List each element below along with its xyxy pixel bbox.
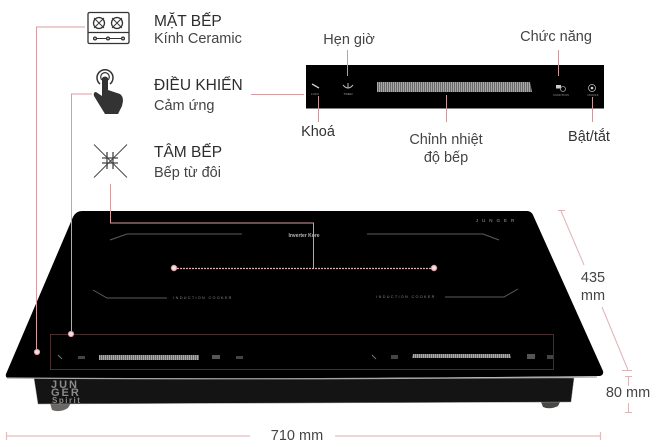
inverter label: Inverter Kore — [288, 233, 320, 239]
left control strip — [58, 355, 243, 360]
connector: controls to panel — [251, 94, 304, 96]
heading: điều khiển: ĐIỀU KHIỂN — [154, 76, 243, 94]
dimension: depth 435 mm: 435 — [581, 270, 605, 286]
callout: chỉnh nhiệt độ bếp: Chỉnh nhiệt — [409, 132, 483, 148]
dimension: height 80 mm: 80 mm — [606, 385, 650, 401]
cooktop — [6, 211, 603, 411]
timer icon — [343, 83, 353, 96]
dimension: depth 435 mm: mm — [581, 288, 605, 304]
right control strip — [372, 354, 553, 359]
icon: hob — [88, 12, 129, 44]
connector: controls — [50, 94, 554, 370]
left zone marks — [93, 234, 242, 298]
callout: chỉnh nhiệt độ bếp: độ bếp — [424, 150, 468, 166]
dimension: width 710 mm — [6, 428, 600, 444]
cooktop feet — [50, 402, 560, 411]
function icon — [553, 85, 569, 97]
icon: touch hand — [94, 70, 123, 114]
callout: chức năng: Chức năng — [520, 29, 592, 45]
callout: bật/tắt: Bật/tắt — [568, 128, 610, 145]
callout: bật/tắt — [568, 97, 610, 145]
temperature slider — [377, 82, 532, 92]
dimension: height 80 mm — [606, 376, 650, 412]
brand block: GER — [51, 387, 81, 399]
lock icon: LOCK — [311, 92, 319, 96]
cooktop base — [34, 378, 574, 404]
text: cảm ứng: Cảm ứng — [154, 98, 214, 114]
heading: tâm bếp: TÂM BẾP — [154, 144, 222, 161]
callout: khoá — [301, 96, 336, 140]
heading: mặt bếp: MẶT BẾP — [154, 13, 222, 30]
callout: khoá: Khoá — [301, 124, 336, 140]
right zone marks — [367, 234, 518, 297]
dimension: depth 435 mm — [558, 210, 632, 370]
timer icon: TIMER — [343, 92, 353, 96]
connector: cooktop surface — [34, 27, 85, 355]
brand block — [51, 379, 81, 405]
right induction label: INDUCTION COOKER — [376, 295, 436, 299]
function icon: FUNCTION — [553, 93, 569, 97]
left induction label: INDUCTION COOKER — [173, 296, 233, 300]
brand block: JUN — [51, 379, 79, 391]
dimension: width 710 mm: 710 mm — [271, 428, 323, 444]
glass surface — [6, 211, 603, 378]
text: kính ceramic: Kính Ceramic — [154, 31, 242, 47]
glass edge highlight — [7, 377, 597, 379]
brand on glass: JUNGER — [476, 218, 518, 223]
brand block: Spirit — [52, 396, 81, 405]
power icon: ON/OFF — [587, 93, 599, 97]
power icon — [587, 84, 599, 97]
callout: hẹn giờ — [323, 32, 375, 76]
callout: chỉnh nhiệt độ bếp — [409, 95, 483, 166]
control panel — [306, 65, 604, 108]
callout: hẹn giờ: Hẹn giờ — [323, 32, 375, 48]
callout: chức năng — [520, 29, 592, 76]
text: bếp từ đôi: Bếp từ đôi — [154, 165, 221, 181]
lock icon — [311, 84, 319, 96]
connector: zones — [110, 184, 437, 271]
icon: cooking zone — [94, 144, 127, 178]
